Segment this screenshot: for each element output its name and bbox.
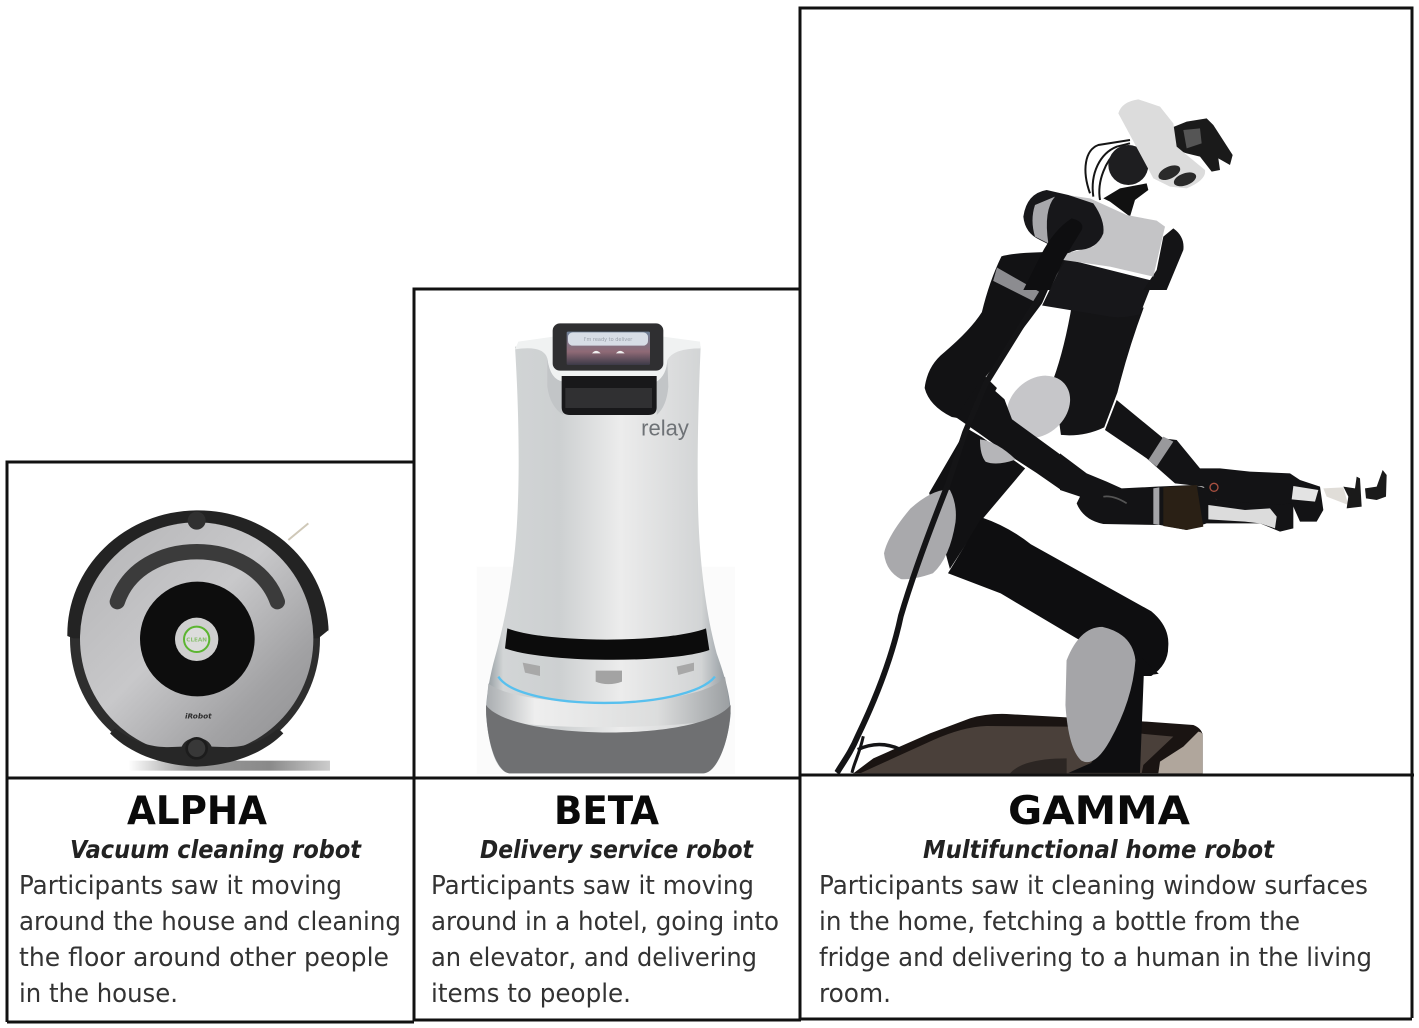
image: vacuum cleaning robot: iRobot — [185, 712, 212, 721]
image: delivery service robot — [477, 323, 735, 774]
description: gamma — [819, 871, 1372, 1009]
image: delivery service robot: I'm ready to deliver — [584, 337, 633, 343]
description: alpha — [19, 871, 401, 1009]
description: gamma: Participants saw it cleaning window surfaces — [819, 871, 1368, 901]
description: beta: around in a hotel, going into — [431, 907, 779, 937]
panel: GAMMA — [800, 8, 1414, 1020]
subtitle: alpha: Vacuum cleaning robot — [70, 835, 362, 864]
description: gamma: in the home, fetching a bottle from the — [819, 907, 1300, 937]
description: gamma: room. — [819, 979, 891, 1009]
image: delivery service robot: relay — [641, 415, 689, 440]
description: beta: an elevator, and delivering — [431, 943, 757, 973]
heading: BETA: BETA — [554, 789, 659, 834]
description: alpha: around the house and cleaning — [19, 907, 401, 937]
panel: ALPHA — [7, 462, 414, 1022]
panel: BETA — [414, 289, 801, 1021]
description: alpha: the floor around other people — [19, 943, 389, 973]
image: vacuum cleaning robot — [67, 510, 330, 771]
subtitle: gamma: Multifunctional home robot — [923, 835, 1275, 864]
image: vacuum cleaning robot: CLEAN — [186, 638, 207, 644]
image: multifunctional home robot — [837, 99, 1387, 773]
description: alpha: Participants saw it moving — [19, 871, 342, 901]
panel frame: beta — [414, 289, 801, 1021]
heading: ALPHA: ALPHA — [127, 789, 267, 834]
description: beta: Participants saw it moving — [431, 871, 754, 901]
description: beta: items to people. — [431, 979, 631, 1009]
heading: GAMMA: GAMMA — [1008, 789, 1190, 834]
panel frame: gamma — [800, 8, 1414, 1020]
description: gamma: fridge and delivering to a human in the living — [819, 943, 1372, 973]
panel frame: alpha — [7, 462, 414, 1022]
subtitle: beta: Delivery service robot — [480, 835, 754, 864]
description: alpha: in the house. — [19, 979, 178, 1009]
description: beta — [431, 871, 779, 1009]
